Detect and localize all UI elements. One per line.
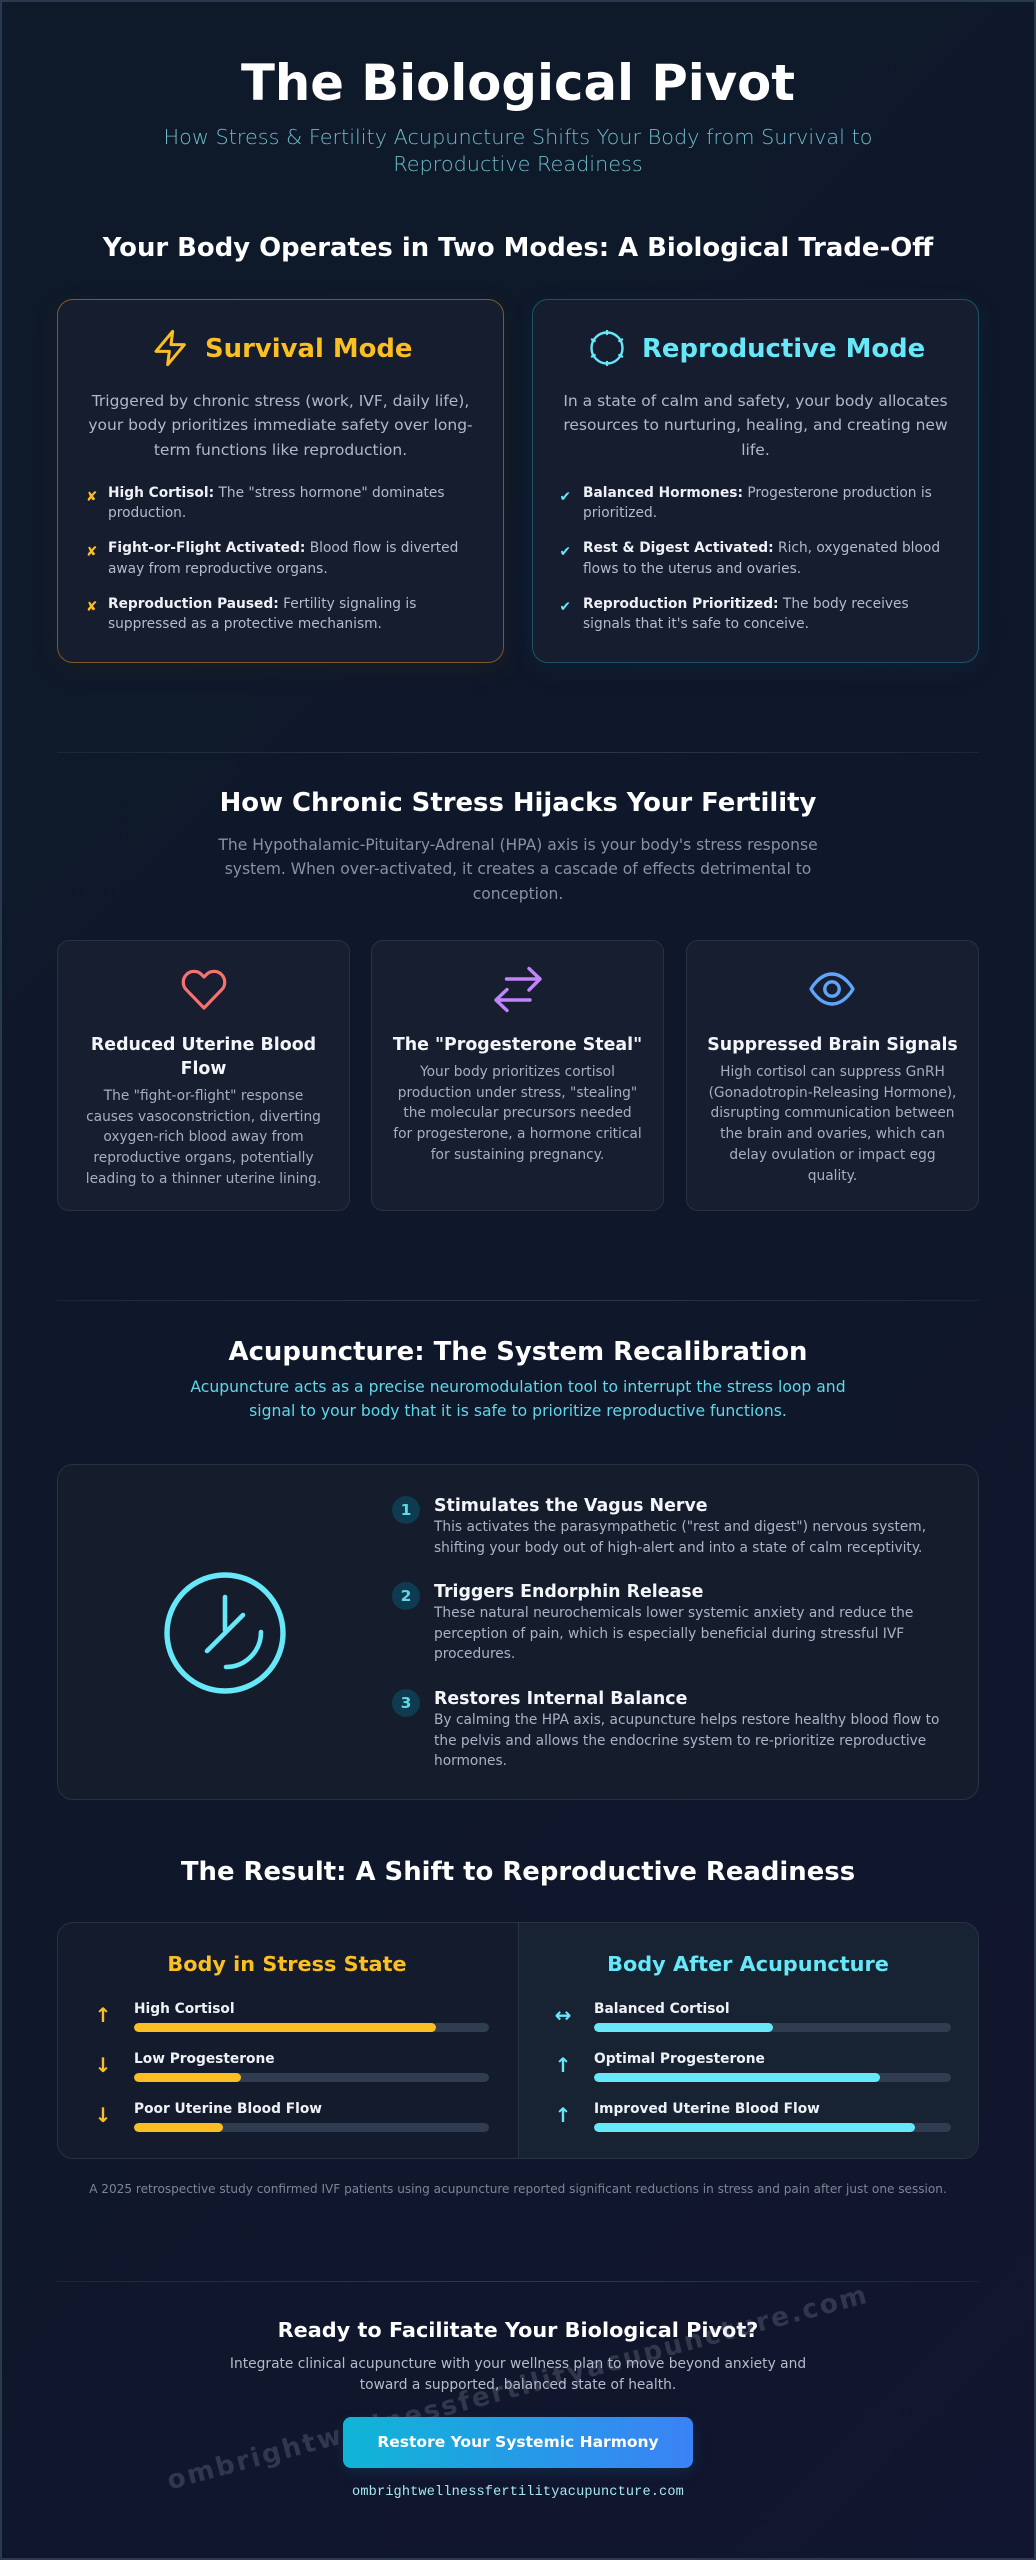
step text: perception of pain, which is especially beneficial during stressful IVF [434,1626,904,1642]
footnote: A 2025 retrospective study confirmed IVF patients using acupuncture reported significant reductions in stress and pain after just one session. [89,2182,947,2196]
card text [393,1064,642,1163]
column: after acupuncture [555,1952,951,2132]
list item: reproduction prioritized [583,596,909,632]
description: resources to nurturing, healing, and creating new [563,416,948,434]
description [88,392,473,459]
card text: The "fight-or-flight" response [104,1088,303,1104]
card title: Flow [181,1058,226,1078]
card text: leading to a thinner uterine lining. [86,1171,321,1187]
heading: survival mode: Survival Mode [205,334,412,364]
button [343,2417,693,2468]
step text: hormones. [434,1753,507,1769]
list item: fight or flight [108,540,458,577]
description: your body prioritizes immediate safety over long- [88,416,473,434]
step number: 2 [401,1587,411,1605]
heading: two modes: Your Body Operates in Two Modes: A Biological Trade-Off [103,233,933,263]
panel: reduced uterine blood flow [57,940,350,1211]
list item: balanced hormones [583,484,932,521]
step 2 [392,1582,913,1662]
step title: Restores Internal Balance [434,1689,687,1709]
step number [392,1689,420,1717]
bar [134,2123,489,2132]
card text: disrupting communication between [710,1105,954,1121]
step text: By calming the HPA axis, acupuncture helps restore healthy blood flow to [434,1712,939,1728]
column heading: Body After Acupuncture [607,1952,889,1976]
step text: the pelvis and allows the endocrine system to re-prioritize reproductive [434,1733,926,1749]
card text: the molecular precursors needed [403,1105,632,1121]
step text: shifting your body out of high-alert and into a state of calm receptivity. [434,1540,922,1556]
list item: reproduction paused: suppressed as a protective mechanism. [108,616,382,632]
card text: for progesterone, a hormone critical [393,1126,642,1142]
list item: high cortisol: production. [108,505,186,521]
icon: swap arrows [494,966,542,1012]
section intro [218,836,818,903]
label: Poor Uterine Blood Flow [134,2101,322,2117]
subtitle: How Stress & Fertility Acupuncture Shifts Your Body from Survival to [164,124,872,148]
card text: the brain and ovaries, which can [720,1126,945,1142]
list item: fight or flight: Fight-or-Flight Activated: Blood flow is diverted [108,540,458,556]
website url: ombrightwellnessfertilityacupuncture.com [352,2485,684,2500]
panel: progesterone steal [371,940,664,1211]
step number: 3 [401,1694,411,1712]
card text: Your body prioritizes cortisol [420,1064,615,1080]
watermark: ombrightwellnessfertilityacupuncture.com [164,2280,872,2496]
bar [134,2073,489,2082]
card text [709,1064,956,1184]
section intro: Acupuncture acts as a precise neuromodulation tool to interrupt the stress loop and [190,1378,846,1396]
description: term functions like reproduction. [154,441,407,459]
subtitle [164,124,872,176]
step 3 [392,1689,939,1769]
step 1 [392,1496,926,1556]
card text [86,1088,321,1187]
section intro: conception. [473,885,563,903]
list marker: ✔ [560,489,571,505]
list item: fight or flight: away from reproductive organs. [108,561,328,577]
arrow up: ↑ [555,2053,571,2077]
button: Restore Your Systemic Harmony [377,2433,659,2451]
card text: causes vasoconstriction, diverting [86,1109,321,1125]
call to action text: toward a supported, balanced state of health. [360,2377,676,2393]
step text: procedures. [434,1646,515,1662]
list item: balanced hormones: prioritized. [583,505,657,521]
arrow up: ↑ [555,2103,571,2127]
card title: Reduced Uterine Blood [91,1034,316,1054]
card title [91,1034,316,1078]
call to action text: Integrate clinical acupuncture with your wellness plan to move beyond anxiety and [230,2356,806,2372]
icon: dashed circle [590,330,624,366]
step text: These natural neurochemicals lower systemic anxiety and reduce the [434,1605,913,1621]
description: In a state of calm and safety, your body allocates [563,392,948,410]
card text: High cortisol can suppress GnRH [720,1064,945,1080]
list marker: ✘ [86,544,97,560]
step number: 1 [401,1501,411,1519]
card title: The "Progesterone Steal" [393,1034,642,1054]
heading: call to action: Ready to Facilitate Your Biological Pivot? [278,2318,758,2342]
list marker: ✔ [560,599,571,615]
heading: acupuncture: Acupuncture: The System Recalibration [229,1336,807,1366]
card text: delay ovulation or impact egg [729,1147,936,1163]
list marker: ✔ [560,544,571,560]
step number [392,1582,420,1610]
card text: (Gonadotropin-Releasing Hormone), [709,1085,956,1101]
heading: chronic stress: How Chronic Stress Hijacks Your Fertility [220,788,816,818]
list item: reproduction paused [108,596,416,632]
label: Improved Uterine Blood Flow [594,2101,820,2117]
list item: balanced hormones: Balanced Hormones: Progesterone production is [583,484,932,500]
list item: rest and digest [583,540,940,577]
bar [594,2023,951,2032]
arrow down: ↓ [95,2053,111,2077]
panel: comparison [57,1922,979,2159]
section intro: signal to your body that it is safe to prioritize reproductive functions. [249,1402,787,1420]
step text [434,1519,926,1556]
column: stress state [95,1952,489,2132]
panel: survival mode [57,299,504,663]
icon: heart [182,970,226,1010]
arrow down: ↓ [95,2103,111,2127]
list item: rest and digest: Rest & Digest Activated: Rich, oxygenated blood [583,540,940,556]
list marker: ✘ [86,599,97,615]
list marker: ✘ [86,489,97,505]
card text: production under stress, "stealing" [398,1085,637,1101]
list item: reproduction paused: Reproduction Paused: Fertility signaling is [108,596,416,612]
bar [134,2023,489,2032]
icon: eye [809,972,855,1006]
icon: lightning bolt [154,330,186,366]
icon: acupuncture dial [164,1572,286,1694]
panel: reproductive mode [532,299,979,663]
card text: oxygen-rich blood away from [103,1129,304,1145]
step text: This activates the parasympathetic ("rest and digest") nervous system, [434,1519,926,1535]
step title: Triggers Endorphin Release [434,1582,703,1602]
label: High Cortisol [134,2001,235,2017]
arrow both ways: ↔ [555,2003,571,2027]
section intro [190,1378,846,1420]
list item: high cortisol [108,484,445,521]
arrow up: ↑ [95,2003,111,2027]
step number [392,1496,420,1524]
section intro: The Hypothalamic-Pituitary-Adrenal (HPA) axis is your body's stress response [218,836,818,854]
step text [434,1712,939,1769]
description: life. [741,441,770,459]
title: The Biological Pivot [241,54,795,112]
panel: recalibration steps [57,1464,979,1800]
card text: reproductive organs, potentially [93,1150,314,1166]
label: Optimal Progesterone [594,2051,765,2067]
column heading: Body in Stress State [167,1952,407,1976]
heading: the result: The Result: A Shift to Reproductive Readiness [181,1856,855,1886]
list item: reproduction prioritized: signals that it's safe to conceive. [583,616,809,632]
label: Low Progesterone [134,2051,275,2067]
list item: rest and digest: flows to the uterus and ovaries. [583,561,801,577]
panel: suppressed brain signals [686,940,979,1211]
bar [594,2073,951,2082]
list item: high cortisol: High Cortisol: The "stress hormone" dominates [108,484,445,500]
call to action text [230,2356,806,2393]
card title: Suppressed Brain Signals [707,1034,958,1054]
list item: reproduction prioritized: Reproduction Prioritized: The body receives [583,596,909,612]
step title: Stimulates the Vagus Nerve [434,1496,708,1516]
card text: quality. [808,1168,857,1184]
step text [434,1605,913,1662]
label: Balanced Cortisol [594,2001,730,2017]
section intro: system. When over-activated, it creates a cascade of effects detrimental to [225,860,811,878]
description [563,392,948,459]
card text: for sustaining pregnancy. [431,1147,604,1163]
bar [594,2123,951,2132]
heading: reproductive mode: Reproductive Mode [642,334,925,364]
subtitle: Reproductive Readiness [393,152,643,176]
description: Triggered by chronic stress (work, IVF, daily life), [92,392,469,410]
